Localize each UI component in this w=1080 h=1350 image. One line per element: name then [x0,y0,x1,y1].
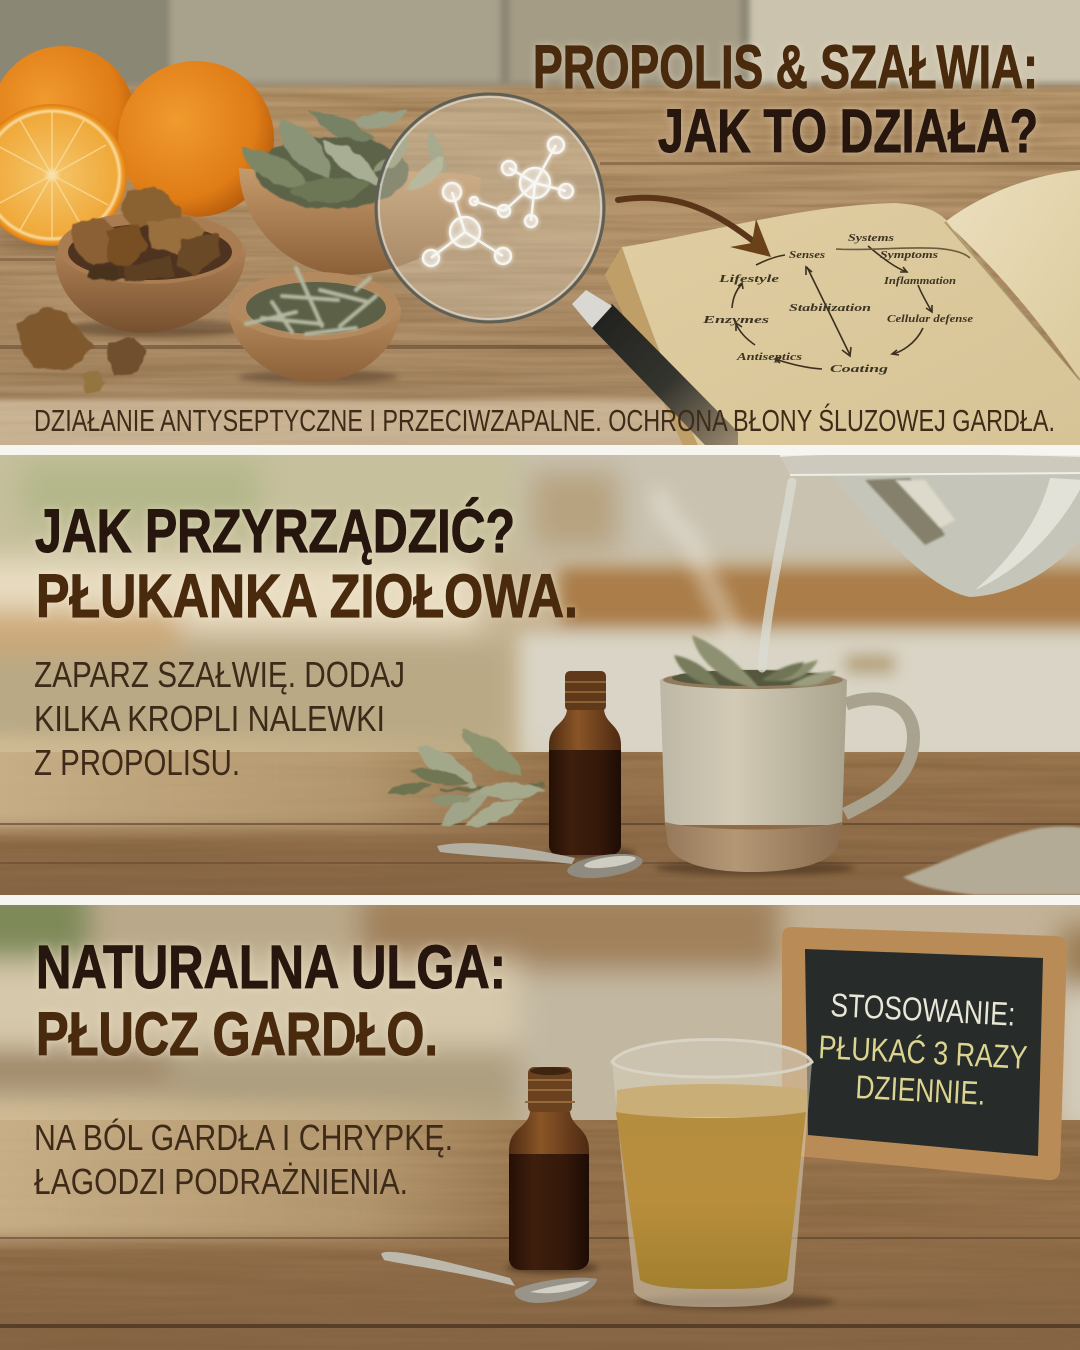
diagram: handwritten cycle: Enzymes [701,314,769,326]
panel 3 background [0,880,1080,1350]
diagram: handwritten cycle: Symptoms [880,249,938,261]
chalkboard text [820,994,1028,1105]
icon: spoon [437,843,644,882]
text: indications: NA BÓL GARDŁA I CHRYPKĘ. [34,1117,453,1158]
diagram: handwritten cycle: Coating [830,363,889,375]
heading: preparation: JAK PRZYRZĄDZIĆ? [35,497,515,565]
diagram: handwritten cycle: Systems [848,232,894,244]
icon: dropper bottle [548,671,636,859]
icon: oranges [0,46,274,250]
icon: bowl with propolis [55,186,246,337]
heading: natural relief [36,942,504,1058]
icon: spoon [381,1252,597,1303]
heading: propolis and sage [532,42,1039,156]
molecule [423,137,573,266]
chalkboard [782,927,1067,1180]
heading: preparation: PŁUKANKA ZIOŁOWA. [36,562,578,630]
icon: book with cycle diagram [605,170,1080,450]
diagram: handwritten cycle [701,232,973,375]
heading: preparation [35,497,578,630]
diagram: handwritten cycle: Antiseptics [736,351,802,363]
chalkboard text: PŁUKAĆ 3 RAZY [818,1028,1028,1076]
panel 2 background [0,430,1080,895]
diagram: handwritten cycle: Inflammation [883,275,956,287]
panel: how it works [0,0,1080,460]
diagram: handwritten cycle: Cellular defense [887,313,973,325]
icon: water stream [762,482,792,668]
diagram: handwritten cycle: Lifestyle [717,273,779,285]
diagram: handwritten cycle: Senses [789,249,825,261]
icon: glass of herbal tea [612,1040,835,1310]
text: indications [34,1118,450,1194]
icon: mug with sage [655,635,914,875]
icon: magnifying glass with molecule [376,94,738,445]
text: preparation steps [34,662,403,776]
icon: bowl with sage leaves [239,110,481,275]
panel 1 background [0,0,1080,460]
chalkboard text: DZIENNIE. [855,1068,986,1112]
icon: loose propolis pieces [16,308,146,392]
diagram: handwritten cycle: Stabilization [789,302,871,314]
text: preparation steps: ZAPARZ SZAŁWIĘ. DODAJ [34,654,405,695]
icon: sage sprig [388,730,545,826]
icon: cloth napkin [903,826,1080,895]
heading: natural relief: PŁUCZ GARDŁO. [36,1000,438,1068]
heading: natural relief: NATURALNA ULGA: [36,933,506,1001]
icon: small bowl with sage [228,268,401,384]
text: indications: ŁAGODZI PODRAŻNIENIA. [34,1161,408,1202]
chalkboard text: STOSOWANIE: [830,986,1016,1033]
text: preparation steps: KILKA KROPLI NALEWKI [34,698,385,739]
text: preparation steps: Z PROPOLISU. [34,742,240,783]
icon: steam [662,490,735,640]
panel: preparation [0,430,1080,895]
panel: natural relief [0,880,1080,1350]
arrow into the book [618,198,771,257]
icon: dropper bottle [506,1067,598,1274]
icon: glass pitcher [780,453,1080,597]
